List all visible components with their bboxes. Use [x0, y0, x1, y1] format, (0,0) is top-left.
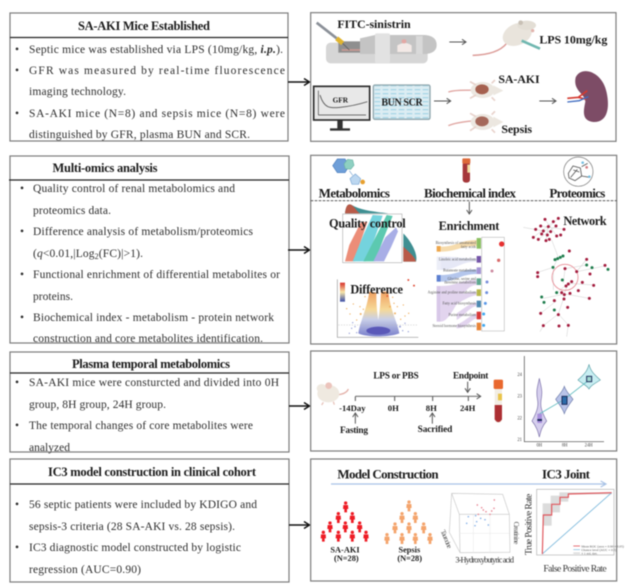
arrow: model direction	[331, 481, 606, 487]
arrow	[434, 99, 451, 102]
chart: quality control scatter	[329, 204, 416, 263]
panel: multi-omics analysis	[9, 156, 289, 345]
panel: plasma temporal metabolomics	[10, 352, 289, 454]
icon: mouse	[317, 382, 348, 405]
icon: injected mouse	[473, 18, 540, 55]
label: Fasting: Fasting	[340, 426, 368, 436]
chart: enrichment sankey and dot plot: Arginine and proline metabolism	[428, 291, 476, 295]
chart: enrichment sankey and dot plot: Biosynthesis of unsaturated	[436, 241, 476, 245]
label: Sacrified: Sacrified	[418, 425, 453, 435]
arrows: left to right	[288, 82, 309, 525]
arrow	[449, 40, 466, 43]
label: Enrichment: Enrichment	[439, 219, 500, 233]
text block: mice bullets: GFR was measured by real-time fluorescence	[29, 65, 285, 77]
chart: violin plot: 24	[517, 373, 523, 378]
label: Quality control: Quality control	[329, 217, 406, 231]
timeline: 0H	[388, 403, 399, 413]
chart: violin plot: 22	[517, 416, 523, 421]
text block: multi-omics bullets: 2	[95, 252, 99, 261]
text block: multi-omics bullets: construction and core metabolites identification.	[33, 333, 263, 345]
panel: SA-AKI mice established	[10, 13, 288, 141]
label: Creatinine axis: Creatinine	[512, 522, 520, 544]
label: LPS or PBS: LPS or PBS	[373, 371, 419, 381]
icon: blood tube	[494, 380, 503, 423]
text block: multi-omics bullets: proteomics data.	[33, 205, 111, 217]
chart: enrichment sankey and dot plot: Butanoate metabolism	[443, 268, 476, 272]
text block: mice bullets: Septic mice was established via LPS (10mg/kg, i.p.).	[29, 44, 283, 56]
label: Sepsis N=28: Sepsis	[398, 545, 421, 554]
icon: imaging machine	[326, 33, 437, 63]
arrow: endpoint	[466, 382, 469, 392]
label: Taurocine axis: Taurocine	[439, 529, 453, 550]
icon: GFR monitor	[314, 86, 370, 131]
chart: violin plot: 23	[517, 394, 523, 399]
panel: model construction illustration	[311, 459, 624, 581]
chart: ROC curve: Chance level (AUC = 0.5)	[581, 548, 616, 552]
text block: multi-omics bullets: Functional enrichment of differential metabolites or	[33, 269, 280, 281]
icon: BUN SCR plate: BUN SCR	[381, 97, 423, 108]
arrow: fasting	[354, 413, 357, 424]
text block: IC3 bullets: IC3 diagnostic model constructed by logistic	[29, 542, 241, 554]
label: Sepsis: Sepsis	[501, 122, 532, 136]
chart: violin plot: 24H	[585, 443, 593, 448]
chart: violin plot	[517, 356, 604, 448]
label: IC3 Joint: IC3 Joint	[542, 466, 591, 481]
label: True Positive Rate: True Positive Rate	[523, 494, 534, 555]
chart: enrichment sankey and dot plot: Linoleic acid metabolism	[439, 257, 476, 261]
text block: plasma bullets: •	[15, 377, 19, 389]
arrow: down to enrichment	[468, 202, 471, 214]
label: Difference: Difference	[350, 282, 404, 296]
text block: IC3 bullets	[15, 499, 257, 576]
text block: IC3 bullets: •	[15, 542, 19, 554]
label: LPS 10mg/kg: LPS 10mg/kg	[539, 33, 607, 47]
label: SA-AKI N=28: SA-AKI	[330, 545, 360, 554]
text block: plasma bullets: SA-AKI mice were consturcted and divided into 0H	[29, 377, 279, 389]
heading: Plasma temporal metabolomics: Plasma temporal metabolomics	[72, 357, 230, 371]
label: Model Construction: Model Construction	[337, 466, 439, 481]
chart: enrichment sankey and dot plot: Fatty acid biosynthesis	[442, 302, 477, 306]
label: Metabolomics: Metabolomics	[319, 186, 390, 201]
icon: GFR monitor: GFR	[333, 95, 349, 104]
text block: multi-omics bullets: Quality control of renal metabolomics and	[33, 183, 235, 195]
text block: multi-omics bullets	[20, 183, 280, 345]
label: False Positive Rate: False Positive Rate	[543, 564, 607, 575]
timeline: 8H	[426, 403, 437, 413]
icon: sepsis mouse	[448, 111, 503, 133]
chart: 3D scatter	[439, 493, 520, 565]
label: Network: Network	[563, 214, 607, 228]
text block: IC3 bullets: •	[15, 499, 19, 511]
label: SA-AKI N=28	[330, 545, 360, 563]
text block: mice bullets: •	[15, 65, 19, 77]
arrow: sacrified	[431, 413, 434, 424]
label: FITC-sinistrin: FITC-sinistrin	[337, 17, 411, 31]
timeline: -14Day	[339, 403, 366, 413]
label: SA-AKI N=28: (N=28)	[334, 554, 359, 563]
chart: violin plot: 21	[517, 438, 523, 443]
chart: enrichment sankey and dot plot: threonine metabolism	[444, 281, 476, 285]
heading: Multi-omics analysis: Multi-omics analysis	[52, 161, 158, 175]
arrow	[539, 99, 556, 102]
timeline	[339, 396, 481, 413]
text block: mice bullets: distinguished by GFR, plasma BUN and SCR.	[29, 129, 250, 141]
heading: IC3 model construction in clinical cohort: IC3 model construction in clinical cohort	[48, 465, 257, 479]
chart: violin plot: 0H	[536, 443, 543, 448]
text block: multi-omics bullets: •	[20, 312, 24, 324]
icon: SA-AKI mouse	[448, 80, 503, 101]
heading: SA-AKI Mice Established: SA-AKI Mice Established	[78, 19, 210, 33]
text block: multi-omics bullets: •	[20, 183, 24, 195]
chart: enrichment sankey and dot plot: fatty acids	[461, 245, 477, 249]
text block: mice bullets: •	[15, 44, 19, 56]
text block: plasma bullets	[15, 377, 279, 454]
text block: mice bullets: SA-AKI mice (N=8) and sepsis mice (N=8) were	[29, 108, 285, 120]
panel: multi-omics illustration	[311, 155, 617, 344]
text block: plasma bullets: •	[15, 420, 19, 432]
label: Endpoint: Endpoint	[453, 371, 489, 381]
text block: mice bullets	[15, 44, 285, 141]
chart: ROC curve: Mean ROC (area = 0.90 ± 0.05)	[581, 544, 624, 548]
icon: SA-AKI patients	[321, 501, 369, 542]
text block: multi-omics bullets: Difference analysis of metabolism/proteomics	[33, 226, 254, 238]
chart: protein network	[523, 214, 609, 337]
text block: multi-omics bullets: •	[20, 226, 24, 238]
text block: multi-omics bullets: (FC)|>1).	[99, 248, 143, 260]
chart: enrichment sankey and dot plot	[428, 237, 504, 331]
text block: IC3 bullets: 56 septic patients were included by KDIGO and	[29, 499, 257, 511]
chart: violin plot: 8H	[562, 443, 568, 448]
icon: sepsis patients	[384, 500, 433, 544]
text block: multi-omics bullets: proteins.	[33, 291, 73, 303]
timeline: 24H	[460, 403, 476, 413]
chart: enrichment sankey and dot plot: Steroid hormone biosynthesis	[433, 324, 477, 328]
label: 3-Hydroxybutyric acid: 3-Hydroxybutyric acid	[455, 556, 515, 565]
chart: enrichment sankey and dot plot: Glycine, serine and	[448, 277, 476, 282]
chart: ROC curve	[523, 489, 624, 575]
text block: multi-omics bullets: Biochemical index - metabolism - protein network	[33, 312, 274, 324]
panel: temporal metabolomics illustration	[311, 351, 617, 451]
icon: syringe	[317, 23, 349, 50]
panel: experiment illustration	[311, 13, 616, 141]
label: Sepsis N=28	[397, 545, 422, 563]
text block: plasma bullets: The temporal changes of core metabolites were	[29, 420, 253, 432]
label: Sepsis N=28: (N=28)	[397, 554, 422, 563]
label: Biochemical index: Biochemical index	[424, 186, 516, 201]
text block: IC3 bullets: sepsis-3 criteria (28 SA-AKI vs. 28 sepsis).	[29, 521, 235, 533]
text block: plasma bullets: analyzed	[29, 442, 70, 454]
text block: plasma bullets: group, 8H group, 24H group.	[29, 399, 166, 411]
label: SA-AKI: SA-AKI	[498, 72, 540, 86]
text block: IC3 bullets: regression (AUC=0.90)	[29, 564, 141, 576]
text block: mice bullets: imaging technology.	[29, 86, 126, 98]
chart: ROC curve: ± 1 std. dev.	[581, 551, 598, 555]
icon: protein structure	[564, 157, 593, 186]
icon: blood tube	[462, 158, 470, 183]
text block: multi-omics bullets: (q<0.01,|Log	[33, 248, 95, 260]
icon: kidney	[567, 71, 608, 122]
text block: multi-omics bullets: •	[20, 269, 24, 281]
icon: BUN SCR plate	[373, 85, 430, 119]
icon: metabolomics molecules	[333, 159, 365, 184]
panel: IC3 model construction	[10, 459, 289, 582]
text block: mice bullets: •	[15, 108, 19, 120]
chart: volcano plot	[337, 279, 418, 337]
chart: enrichment sankey and dot plot: Purine metabolism	[448, 313, 476, 317]
label: Proteomics: Proteomics	[549, 186, 605, 201]
